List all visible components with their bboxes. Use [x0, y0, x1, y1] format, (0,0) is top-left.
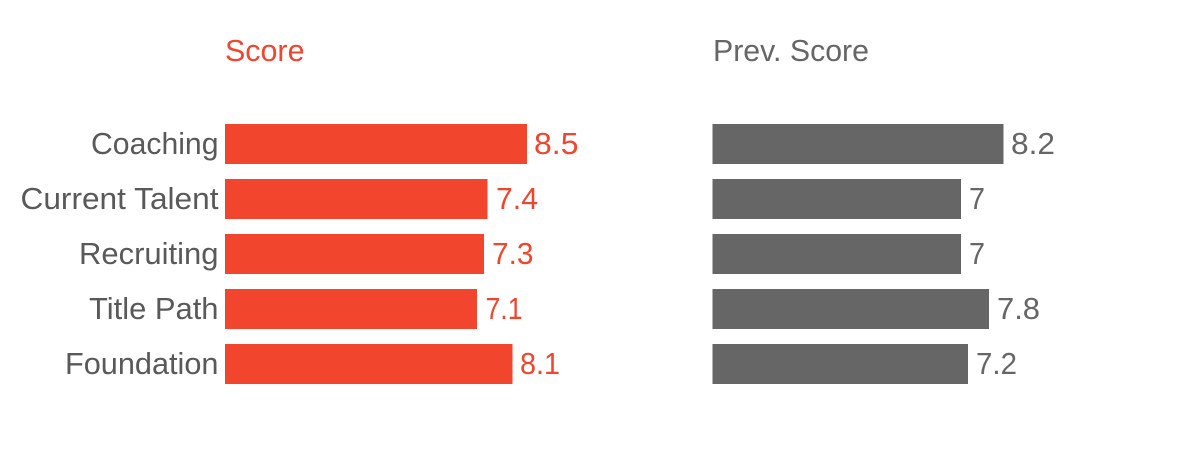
- value: 7.8: 7.8: [997, 292, 1040, 326]
- value: 7.3: 7.3: [492, 237, 534, 271]
- bar: Current Talent 7: [712, 179, 961, 219]
- value: 8.2: 8.2: [1011, 127, 1055, 161]
- heading: Prev. Score: Prev. Score: [713, 34, 869, 68]
- bar: Title Path 7.8: [712, 289, 989, 329]
- panel: Score: [225, 34, 578, 384]
- label: Title Path: Title Path: [89, 292, 218, 326]
- bar: Recruiting 7: [712, 234, 961, 274]
- bar: Title Path 7.1: [225, 289, 477, 329]
- bar: Foundation 7.2: [712, 344, 968, 384]
- bar: Current Talent 7.4: [225, 179, 488, 219]
- value: 8.5: 8.5: [534, 127, 578, 161]
- heading: Score: Score: [225, 34, 304, 68]
- bar: Foundation 8.1: [225, 344, 512, 384]
- label: Coaching: Coaching: [91, 127, 218, 161]
- bar: Coaching 8.5: [225, 124, 527, 164]
- panel: category labels: [20, 127, 219, 381]
- value: 7: 7: [969, 237, 985, 271]
- value: 7: 7: [969, 182, 985, 216]
- value: 7.1: 7.1: [486, 292, 522, 326]
- bar: Recruiting 7.3: [225, 234, 484, 274]
- bar: Coaching 8.2: [712, 124, 1004, 164]
- label: Recruiting: Recruiting: [79, 237, 218, 271]
- label: Current Talent: Current Talent: [20, 182, 219, 216]
- panel: Prev. Score: [712, 34, 1055, 384]
- value: 7.2: 7.2: [976, 347, 1017, 381]
- value: 7.4: 7.4: [496, 182, 538, 216]
- label: Foundation: Foundation: [65, 347, 218, 381]
- value: 8.1: 8.1: [520, 347, 560, 381]
